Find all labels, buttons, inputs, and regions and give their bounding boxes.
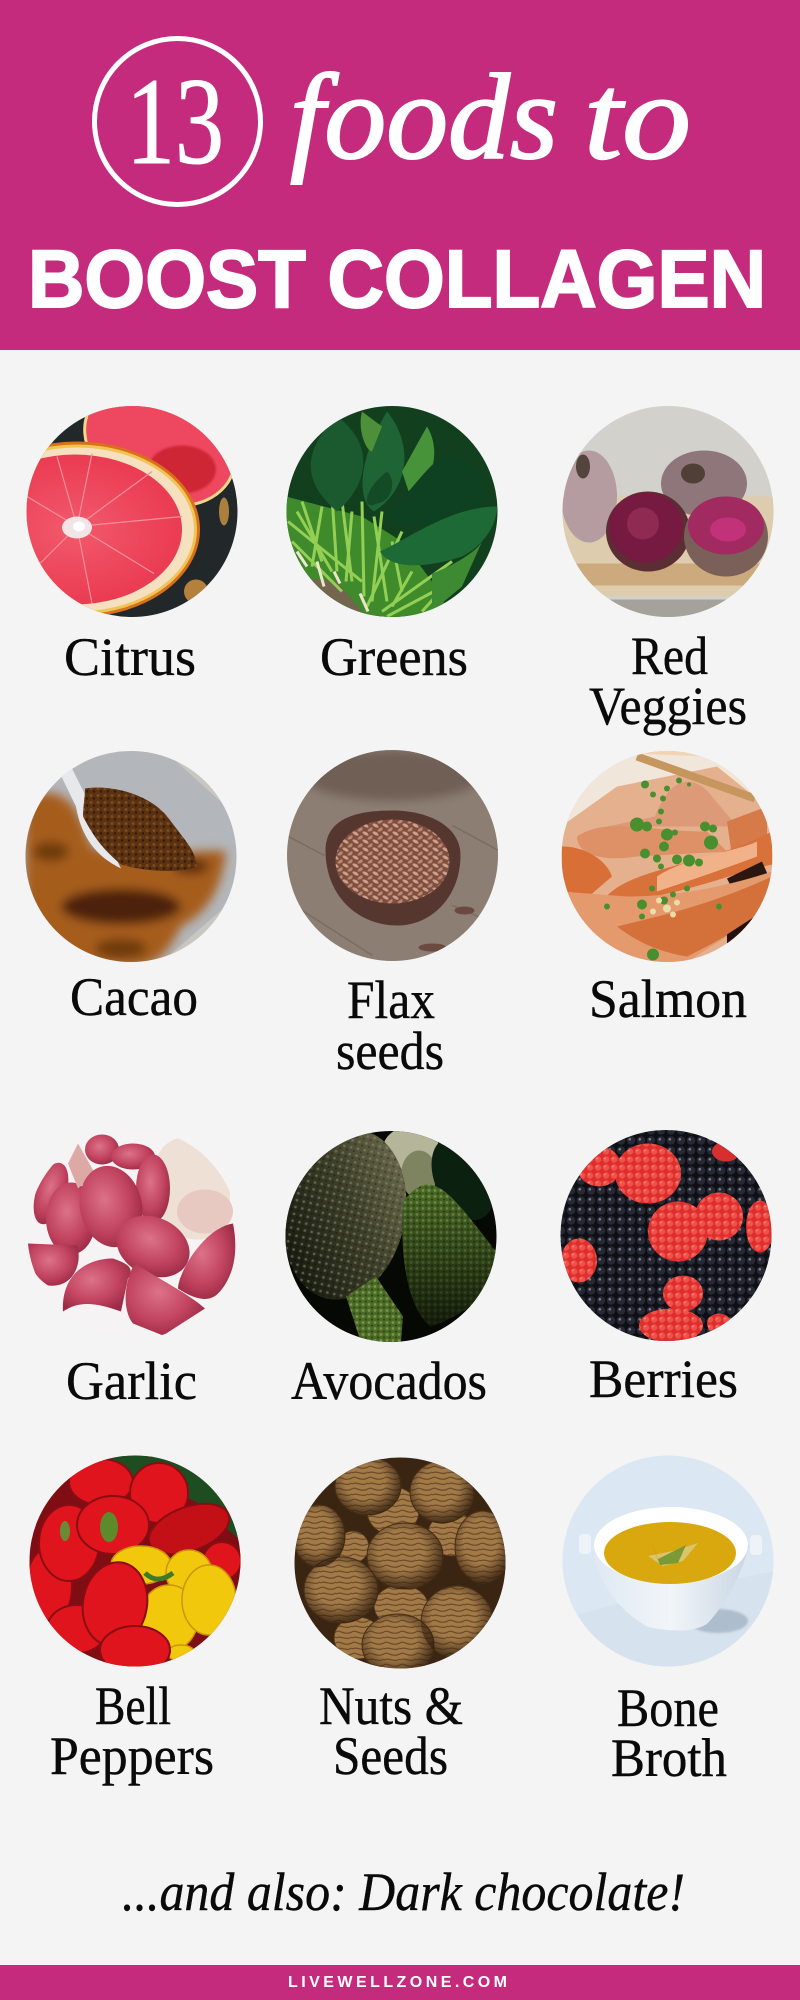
label: Flax seeds	[336, 970, 444, 1081]
label: Bell Peppers: Bell	[95, 1676, 171, 1736]
item: Bone Broth	[562, 1455, 774, 1788]
label: Avocados: Avocados	[291, 1351, 487, 1411]
closing line: ...and also: Dark chocolate!	[122, 1862, 685, 1922]
label: Bone Broth: Bone	[617, 1678, 719, 1738]
item: Cacao	[25, 750, 237, 1027]
header banner	[0, 0, 800, 350]
item: Salmon	[561, 750, 773, 1029]
label: Bell Peppers: Peppers	[50, 1726, 214, 1786]
title: BOOST COLLAGEN: BOOST COLLAGEN	[28, 234, 766, 325]
photo: berries	[560, 1130, 774, 1342]
title script: foods to	[290, 50, 691, 185]
footer bar: LIVEWELLZONE.COM	[288, 1974, 507, 1991]
number badge: 13: 13	[126, 53, 224, 190]
number badge: 13	[94, 38, 260, 204]
photo: grapefruit	[26, 406, 238, 617]
label: Citrus: Citrus	[64, 627, 196, 687]
label: Bell Peppers	[50, 1676, 214, 1786]
item: Garlic	[27, 1128, 241, 1411]
label: Red Veggies: Veggies	[589, 676, 747, 736]
title script: foods to: to	[584, 50, 691, 185]
label: Berries: Berries	[589, 1349, 738, 1409]
label: Nuts & Seeds: Nuts &	[319, 1676, 463, 1736]
title script: foods to: foods	[290, 50, 558, 185]
item: Berries	[560, 1130, 774, 1409]
label: Flax seeds: Flax	[347, 970, 435, 1030]
photo: walnuts	[293, 1457, 511, 1676]
photo: salmon	[561, 750, 773, 962]
label: Bone Broth: Broth	[611, 1728, 727, 1788]
label: Red Veggies	[589, 626, 747, 736]
label: Greens: Greens	[320, 627, 468, 687]
photo: garlic	[27, 1128, 241, 1340]
item: Bell Peppers	[26, 1455, 241, 1786]
label: Salmon: Salmon	[589, 969, 747, 1029]
item: Nuts & Seeds	[293, 1457, 511, 1786]
item: Citrus	[26, 406, 238, 676]
label: Bone Broth	[611, 1678, 727, 1788]
item: Flax seeds	[286, 750, 498, 1081]
item: Red Veggies	[561, 406, 774, 736]
label: Flax seeds: seeds	[336, 1021, 444, 1081]
photo: flax seeds bowl	[286, 750, 498, 962]
footer bar	[0, 1965, 800, 2000]
label: Garlic: Garlic	[66, 1351, 197, 1411]
photo: spinach	[286, 406, 498, 618]
photo: beets	[561, 406, 774, 624]
label: Cacao: Cacao	[70, 967, 198, 1027]
photo: cacao powder	[25, 750, 237, 966]
label: Nuts & Seeds	[319, 1676, 463, 1786]
item: Greens	[286, 406, 498, 687]
item: Avocados	[286, 1131, 496, 1400]
label: Red Veggies: Red	[631, 626, 708, 686]
photo: avocados	[286, 1131, 496, 1342]
label: Nuts & Seeds: Seeds	[333, 1726, 448, 1786]
photo: soup bowl	[562, 1455, 774, 1667]
photo: bell peppers	[26, 1455, 241, 1674]
